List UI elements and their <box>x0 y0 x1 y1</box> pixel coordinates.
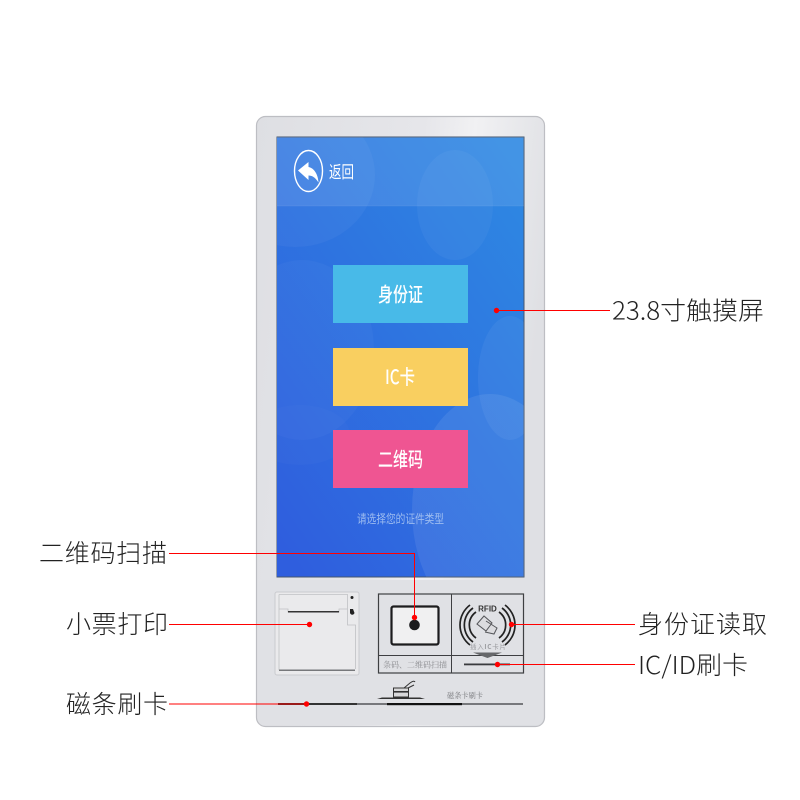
button: IC card: IC卡 <box>385 361 415 390</box>
magnetic card swipe <box>278 681 523 705</box>
callout: ID card read <box>509 605 767 641</box>
swipe caption: 磁条卡刷卡 <box>447 691 483 701</box>
RFID icon <box>460 604 515 645</box>
touch screen <box>276 136 524 578</box>
receipt printer <box>275 592 359 675</box>
screen hint: 请选择您的证件类型 <box>357 510 444 527</box>
RFID icon: RFID <box>478 604 497 614</box>
scanner and card reader panel <box>378 594 524 673</box>
callout: magnetic swipe <box>66 685 309 721</box>
callout: receipt print <box>66 605 312 641</box>
callout: receipt print: 小票打印 <box>66 605 168 641</box>
barcode scanner window <box>392 606 438 644</box>
callout: magnetic swipe: 磁条刷卡 <box>66 685 168 721</box>
insert arrow <box>473 652 502 658</box>
button: ID card: 身份证 <box>378 278 423 308</box>
callout: QR scan: 二维码扫描 <box>39 534 167 570</box>
back label: 返回 <box>329 158 354 183</box>
button: ID card <box>333 265 468 323</box>
callout: IC/ID swipe: IC/ID刷卡 <box>638 646 748 682</box>
callout: touch screen <box>494 292 764 328</box>
back icon <box>294 150 322 192</box>
IC slot <box>464 664 510 665</box>
device body <box>256 116 544 726</box>
button: QR code: 二维码 <box>378 444 423 472</box>
callout: QR scan <box>39 534 417 620</box>
callout: touch screen: 23.8寸触摸屏 <box>612 292 764 328</box>
swipe card icon <box>377 681 425 699</box>
button: IC card <box>333 348 468 406</box>
callout: IC/ID swipe <box>495 646 748 682</box>
button: QR code <box>333 430 468 488</box>
insert IC caption: 插入IC卡片 <box>470 641 506 651</box>
scanner caption: 条码、二维码扫描 <box>383 660 447 670</box>
callout: ID card read: 身份证读取 <box>638 605 767 641</box>
header band <box>277 137 524 206</box>
